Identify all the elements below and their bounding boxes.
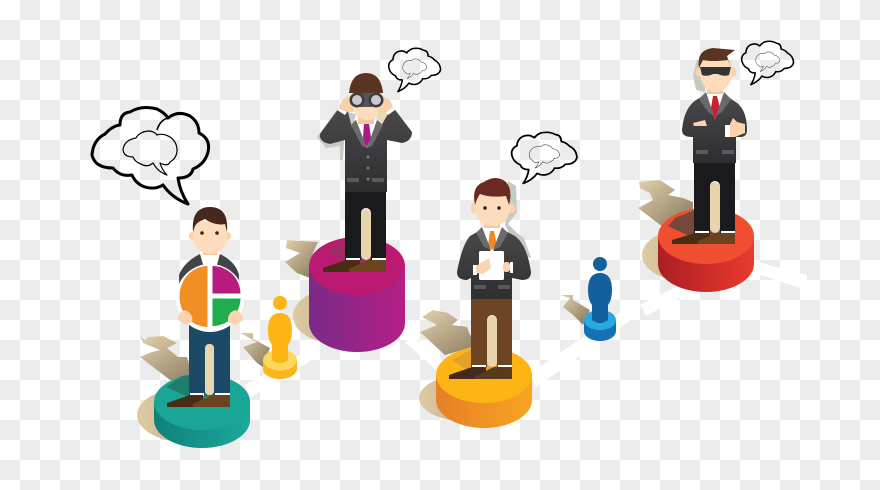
hands xyxy=(178,310,243,325)
shirt and tie xyxy=(355,121,378,148)
thought bubble: tablet man xyxy=(512,132,577,183)
hands xyxy=(473,258,513,275)
hands xyxy=(693,118,745,137)
jacket shoulders xyxy=(179,254,240,320)
orange platform xyxy=(436,347,532,428)
person 2: man with binoculars xyxy=(317,73,412,272)
shoes xyxy=(449,365,512,379)
head xyxy=(470,178,516,228)
ground shadows xyxy=(137,180,738,443)
head xyxy=(696,48,736,94)
teal platform xyxy=(154,374,250,448)
person 1: man holding pie chart xyxy=(167,207,244,407)
head xyxy=(189,207,231,255)
tablet xyxy=(479,251,504,280)
jacket with arms xyxy=(320,107,412,192)
shoes xyxy=(167,393,230,407)
legs xyxy=(471,297,512,367)
thought bubble: large xyxy=(92,108,209,204)
person 4: man with sunglasses xyxy=(672,48,747,244)
legs xyxy=(694,161,735,233)
jacket with arms xyxy=(457,228,531,299)
person 3: man with tablet xyxy=(449,178,531,379)
blue pawn xyxy=(584,257,616,341)
white road paths xyxy=(245,262,807,398)
pie chart xyxy=(176,264,244,332)
legs xyxy=(345,190,386,260)
red platform xyxy=(658,208,754,292)
thought bubble: sunglasses man xyxy=(742,41,794,85)
shirt and tie xyxy=(705,91,725,120)
yellow pawn xyxy=(263,296,297,379)
jacket with folded arms xyxy=(682,93,747,163)
legs xyxy=(189,325,230,395)
head and binoculars xyxy=(337,73,395,124)
figure shadow xyxy=(693,60,705,92)
thought bubble: binoculars man xyxy=(389,48,441,92)
shoes xyxy=(672,231,735,244)
shoes xyxy=(323,258,386,272)
magenta platform xyxy=(309,237,405,352)
shirt and tie xyxy=(482,227,502,255)
figure shadow xyxy=(505,181,531,258)
figure shadow xyxy=(317,108,346,160)
